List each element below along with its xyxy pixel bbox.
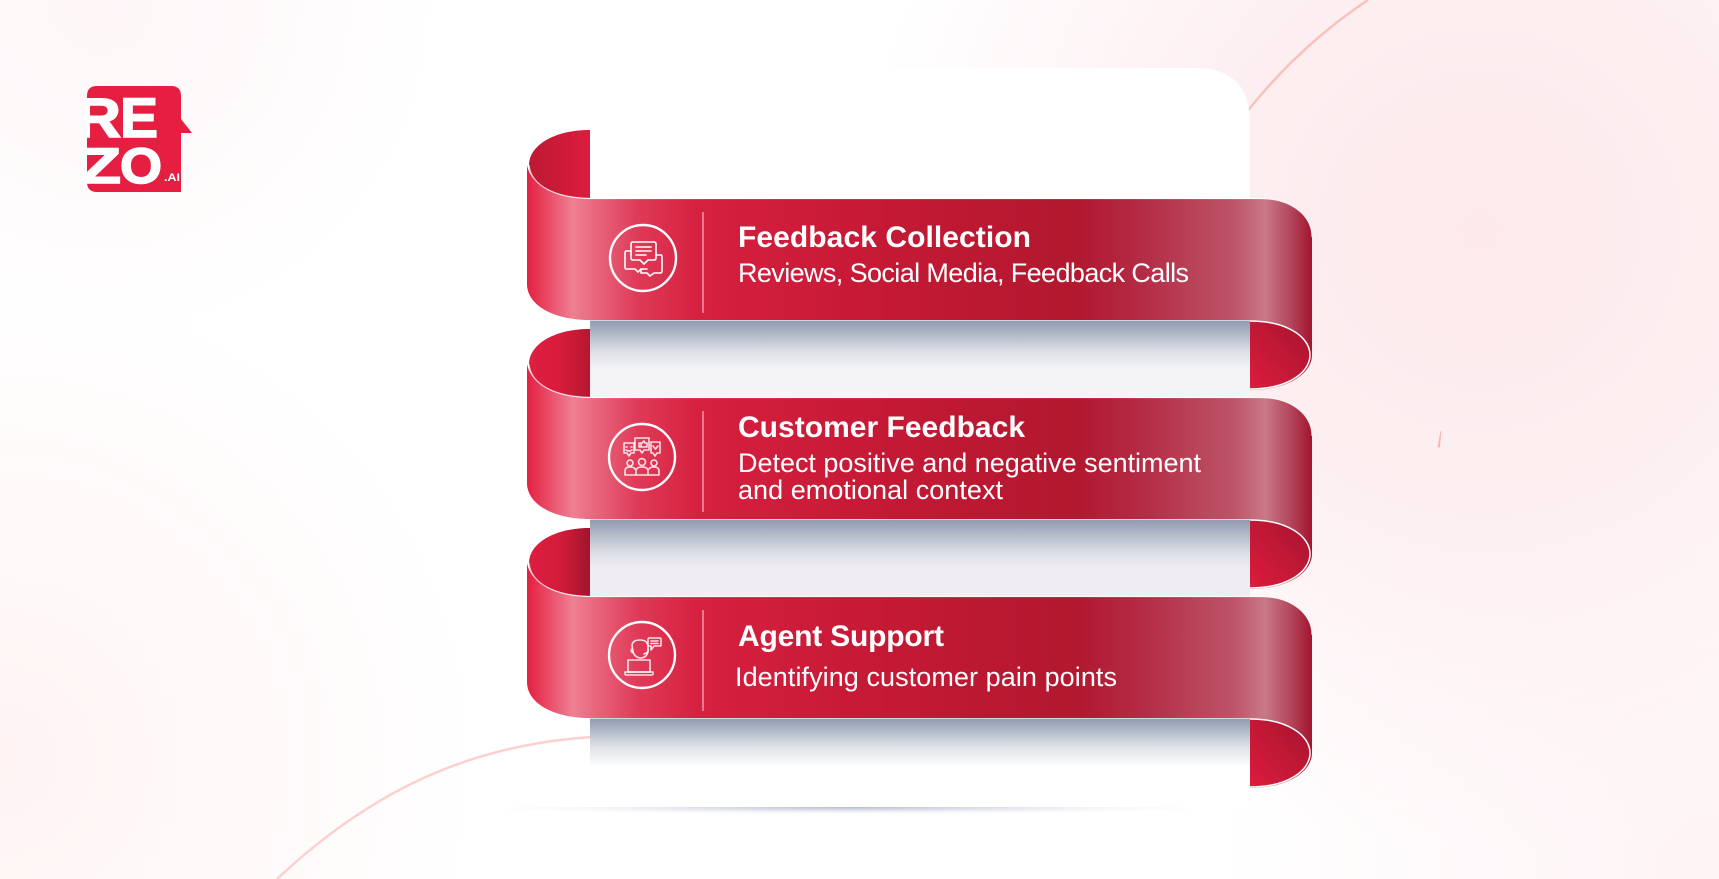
left curl [529, 528, 590, 596]
divider [702, 610, 704, 711]
title: Customer Feedback [738, 411, 1025, 444]
logo lettering: Z [80, 138, 121, 194]
logo lettering: R [76, 86, 121, 149]
band [527, 563, 1312, 788]
description: Identifying customer pain points [735, 662, 1117, 692]
decorative tick [1438, 431, 1441, 447]
underside shade [590, 718, 1250, 798]
logo house shape [87, 86, 192, 192]
ribbon 2: Customer Feedback [527, 329, 1312, 597]
description: and emotional context [738, 475, 1003, 505]
left curl [529, 329, 590, 397]
band [527, 364, 1312, 589]
right curl [1250, 520, 1310, 588]
logo lettering: .AI [164, 172, 180, 184]
description [738, 448, 1201, 505]
icon: customers with reactions [609, 424, 675, 490]
right curl [1250, 321, 1310, 389]
logo lettering: O [120, 138, 162, 194]
white panel [590, 68, 1250, 807]
icon: support agent [609, 622, 675, 688]
icon: chat bubbles [610, 225, 676, 291]
divider [702, 411, 704, 512]
underside shade [590, 320, 1250, 398]
ribbon 1: Feedback Collection [527, 130, 1312, 398]
underside shade [590, 519, 1250, 597]
logo [87, 86, 192, 192]
description: Detect positive and negative sentiment [738, 448, 1201, 478]
panel floor shadow [448, 807, 1248, 824]
band [527, 165, 1312, 390]
title: Agent Support [738, 620, 944, 653]
logo lettering: E [120, 86, 158, 149]
left curl [529, 130, 590, 198]
decorative arc: top right [1246, 0, 1368, 113]
logo lettering [87, 98, 180, 184]
ribbon 3: Agent Support [527, 528, 1312, 798]
description: Reviews, Social Media, Feedback Calls [738, 258, 1189, 288]
divider [702, 212, 704, 313]
right curl [1250, 719, 1310, 787]
decorative arc: bottom left [277, 737, 592, 879]
title: Feedback Collection [738, 221, 1031, 254]
